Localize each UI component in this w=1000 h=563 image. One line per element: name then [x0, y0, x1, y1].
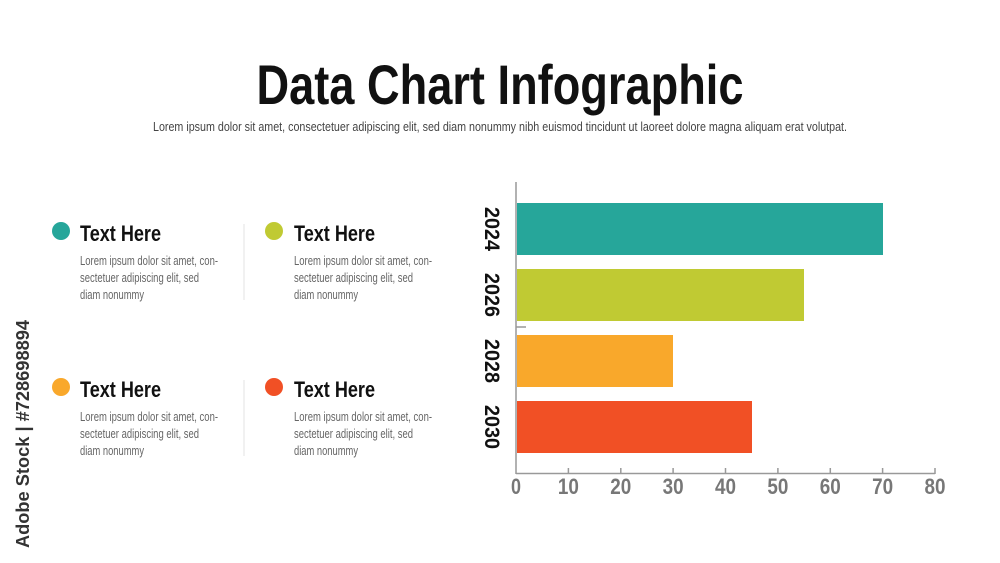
item: orange: diam nonummy [80, 443, 144, 458]
subtitle: Lorem ipsum dolor sit amet, consectetuer adipiscing elit, sed diam nonummy nibh euismod tincidunt ut laoreet dolore magna aliquam erat volutpat. [153, 119, 847, 134]
item: red: Lorem ipsum dolor sit amet, con- [294, 409, 432, 424]
bar chart: 0 [511, 474, 521, 499]
item: lime: Text Here [294, 221, 375, 246]
bar chart: 20 [610, 474, 631, 499]
bar chart: 10 [558, 474, 579, 499]
item: red: diam nonummy [294, 443, 358, 458]
bar chart: 40 [715, 474, 736, 499]
bar chart: 2030 [480, 405, 503, 449]
item: teal: sectetuer adipiscing elit, sed [80, 270, 199, 285]
bar chart: 2026 [480, 273, 503, 317]
side credit: Adobe Stock | #728698894 [13, 320, 33, 548]
item: orange: Lorem ipsum dolor sit amet, con- [80, 409, 218, 424]
item: teal [52, 221, 218, 302]
item: red [265, 377, 432, 458]
bar chart: 80 [924, 474, 946, 499]
item: orange: sectetuer adipiscing elit, sed [80, 426, 199, 441]
bar chart: 50 [767, 474, 788, 499]
bar chart: 70 [872, 474, 893, 499]
item: lime [265, 221, 432, 302]
bar chart: 2028 [480, 339, 503, 383]
item: lime: sectetuer adipiscing elit, sed [294, 270, 413, 285]
item: teal: diam nonummy [80, 287, 144, 302]
bar chart: 60 [820, 474, 841, 499]
item: red: sectetuer adipiscing elit, sed [294, 426, 413, 441]
item: lime: diam nonummy [294, 287, 358, 302]
item: lime: Lorem ipsum dolor sit amet, con- [294, 253, 432, 268]
bar chart [480, 182, 946, 499]
item: orange [52, 377, 218, 458]
item: red: Text Here [294, 377, 375, 402]
bar chart: 30 [663, 474, 684, 499]
item: teal: Text Here [80, 221, 161, 246]
item: teal: Lorem ipsum dolor sit amet, con- [80, 253, 218, 268]
bar chart: 2024 [480, 207, 503, 251]
item: orange: Text Here [80, 377, 161, 402]
title: Data Chart Infographic [256, 53, 744, 116]
